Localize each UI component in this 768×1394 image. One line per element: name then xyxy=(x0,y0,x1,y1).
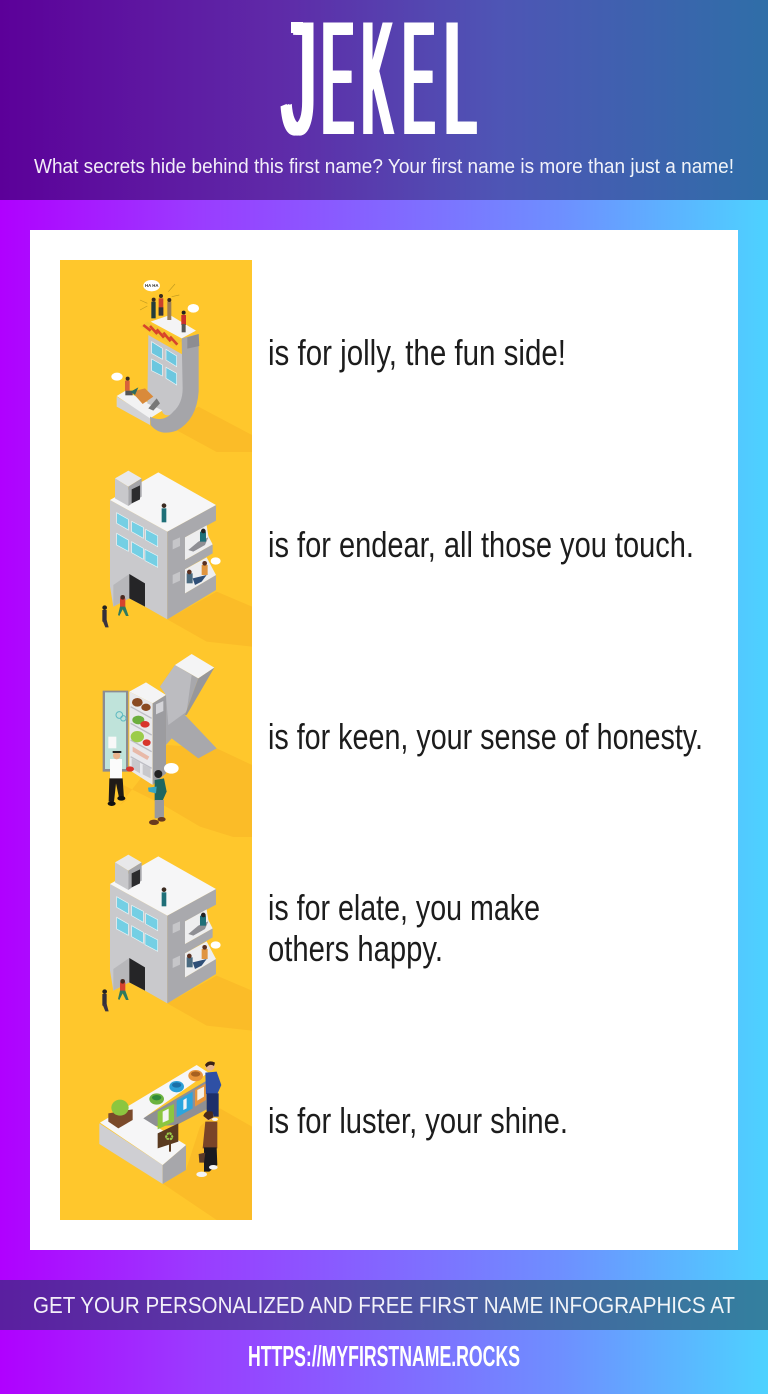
text: second E line: is for elate, you make xyxy=(268,887,540,928)
white content panel xyxy=(30,230,738,1250)
illustration: letter L recycling counter: ♻ xyxy=(164,1132,174,1144)
text: second E line: others happy. xyxy=(268,928,443,969)
subtitle: What secrets hide behind this first name? Your first name is more than just a name! xyxy=(34,155,734,178)
footer url: HTTPS://MYFIRSTNAME.ROCKS xyxy=(248,1341,520,1373)
text: second E line xyxy=(268,887,540,969)
illustration column xyxy=(60,260,252,1220)
illustration: letter E building xyxy=(102,471,252,647)
title xyxy=(280,0,477,150)
text: J line: is for jolly, the fun side! xyxy=(268,332,566,373)
illustration: letter L recycling counter xyxy=(99,1061,252,1220)
illustration: letter J building xyxy=(111,280,252,452)
illustration: letter J building: HA HA xyxy=(145,283,159,288)
illustration: letter K with fridge xyxy=(103,654,252,837)
header band xyxy=(0,0,768,200)
text: L line: is for luster, your shine. xyxy=(268,1100,568,1141)
illustration: letter E building (second) xyxy=(102,855,252,1031)
footer call-to-action band xyxy=(0,1280,768,1330)
